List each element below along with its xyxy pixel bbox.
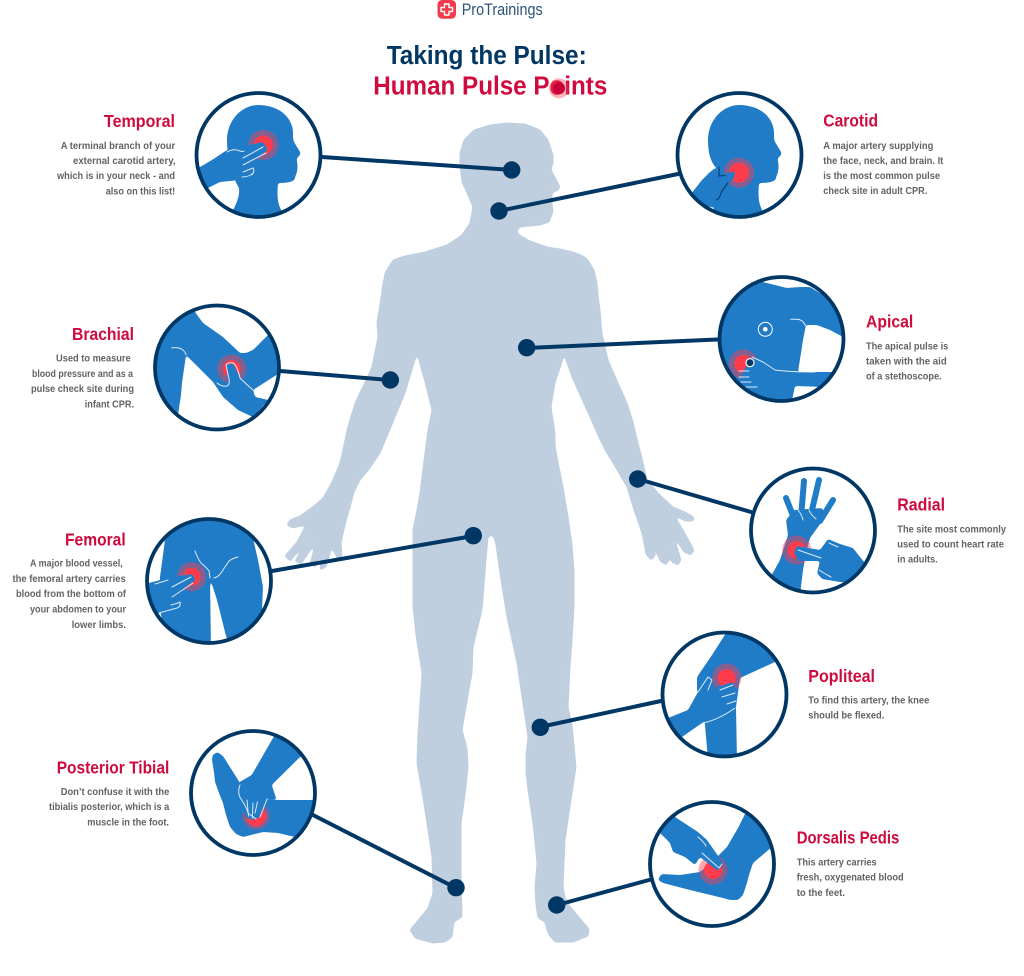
heading: Carotid: Carotid bbox=[823, 111, 878, 131]
connector: posterior tibial bbox=[313, 815, 465, 896]
text: Apical description: of a stethoscope. bbox=[866, 371, 942, 382]
text: Dorsalis Pedis description: to the feet. bbox=[797, 888, 845, 899]
icon: radial pulse check bbox=[751, 468, 875, 595]
text: Posterior Tibial description bbox=[49, 787, 170, 828]
text: Dorsalis Pedis description: This artery carries bbox=[797, 858, 877, 869]
icon: popliteal pulse check bbox=[660, 630, 788, 758]
text: Radial description bbox=[897, 524, 1006, 565]
heading: Apical: Apical bbox=[866, 311, 913, 331]
text: Femoral description: your abdomen to your bbox=[30, 605, 126, 616]
text: Femoral description bbox=[12, 559, 127, 631]
text: Popliteal description: should be flexed. bbox=[808, 710, 884, 721]
text: Apical description bbox=[866, 341, 949, 382]
text: Apical description: The apical pulse is bbox=[866, 341, 949, 352]
title: Human Pulse Points bbox=[373, 72, 607, 100]
connector: dorsalis pedis bbox=[548, 880, 649, 914]
text: Brachial description: Used to measure bbox=[56, 354, 131, 365]
text: Posterior Tibial description: muscle in the foot. bbox=[87, 817, 169, 828]
logo: ProTrainings: ProTrainings bbox=[462, 1, 543, 19]
panel: apical bbox=[718, 275, 948, 403]
panel: radial bbox=[751, 468, 1006, 595]
connector: brachial bbox=[280, 371, 399, 389]
text: Posterior Tibial description: Don’t confuse it with the bbox=[61, 787, 170, 798]
text: Dorsalis Pedis description bbox=[797, 858, 904, 899]
text: Brachial description: infant CPR. bbox=[85, 400, 134, 410]
text: Temporal description: external carotid artery, bbox=[73, 156, 176, 167]
panel: brachial bbox=[32, 304, 281, 432]
heading: Dorsalis Pedis: Dorsalis Pedis bbox=[797, 827, 900, 847]
text: Femoral description: lower limbs. bbox=[72, 620, 126, 631]
panel: dorsalis pedis bbox=[650, 800, 904, 926]
panel: femoral bbox=[12, 517, 273, 645]
panel: temporal bbox=[56, 93, 320, 225]
panel: popliteal bbox=[660, 620, 930, 760]
text: Brachial description: blood pressure and as a bbox=[32, 369, 133, 380]
text: Brachial description: pulse check site during bbox=[31, 384, 134, 395]
text: Carotid description bbox=[823, 141, 944, 197]
text: Temporal description bbox=[56, 141, 176, 198]
icon: temporal pulse check bbox=[190, 93, 320, 225]
connector: popliteal bbox=[532, 701, 661, 736]
heading: Femoral: Femoral bbox=[65, 529, 126, 549]
text: Femoral description: the femoral artery carries bbox=[12, 574, 126, 585]
heading: Popliteal: Popliteal bbox=[808, 666, 875, 686]
text: Radial description: The site most commonly bbox=[897, 524, 1006, 535]
icon: dorsalis pedis pulse check bbox=[650, 800, 785, 926]
icon: carotid pulse check bbox=[678, 93, 802, 225]
heading: Brachial: Brachial bbox=[72, 324, 134, 344]
text: Temporal description: which is in your neck - and bbox=[56, 171, 175, 182]
text: Carotid description: A major artery supplying bbox=[823, 141, 933, 152]
text: Carotid description: check site in adult CPR. bbox=[823, 186, 927, 197]
heading: Radial: Radial bbox=[897, 495, 945, 515]
text: Dorsalis Pedis description: fresh, oxygenated blood bbox=[797, 873, 904, 884]
icon: femoral pulse check bbox=[145, 517, 273, 645]
panel: posterior tibial bbox=[49, 720, 325, 855]
text: Carotid description: is the most common pulse bbox=[823, 171, 940, 182]
text: Radial description: used to count heart rate bbox=[897, 539, 1004, 550]
connector: apical bbox=[518, 339, 717, 356]
connector: carotid bbox=[490, 174, 678, 220]
text: Posterior Tibial description: tibialis posterior, which is a bbox=[49, 802, 170, 813]
connector: temporal bbox=[322, 157, 520, 179]
body silhouette bbox=[285, 123, 694, 943]
icon: brachial pulse check bbox=[153, 304, 281, 432]
text: Carotid description: the face, neck, and brain. It bbox=[823, 156, 944, 167]
heading: Temporal: Temporal bbox=[104, 111, 175, 131]
text: Radial description: in adults. bbox=[897, 554, 938, 565]
heading: Posterior Tibial: Posterior Tibial bbox=[57, 757, 169, 777]
text: Femoral description: A major blood vessel, bbox=[30, 559, 123, 570]
connector: radial bbox=[629, 470, 751, 512]
text: Brachial description bbox=[31, 354, 134, 410]
connector: femoral bbox=[272, 527, 482, 571]
title: Taking the Pulse: bbox=[387, 42, 587, 70]
text: Temporal description: A terminal branch of your bbox=[61, 141, 175, 152]
panel: carotid bbox=[678, 93, 944, 225]
icon: posterior tibial pulse check bbox=[191, 720, 325, 855]
title bbox=[373, 42, 607, 100]
text: Temporal description: also on this list! bbox=[106, 186, 175, 198]
icon: apical pulse check bbox=[718, 275, 846, 403]
text: Apical description: taken with the aid bbox=[866, 356, 947, 367]
text: Popliteal description: To find this artery, the knee bbox=[808, 695, 930, 706]
text: Femoral description: blood from the bottom of bbox=[16, 589, 127, 600]
text: Popliteal description bbox=[808, 695, 930, 721]
logo: ProTrainings bbox=[438, 0, 543, 19]
